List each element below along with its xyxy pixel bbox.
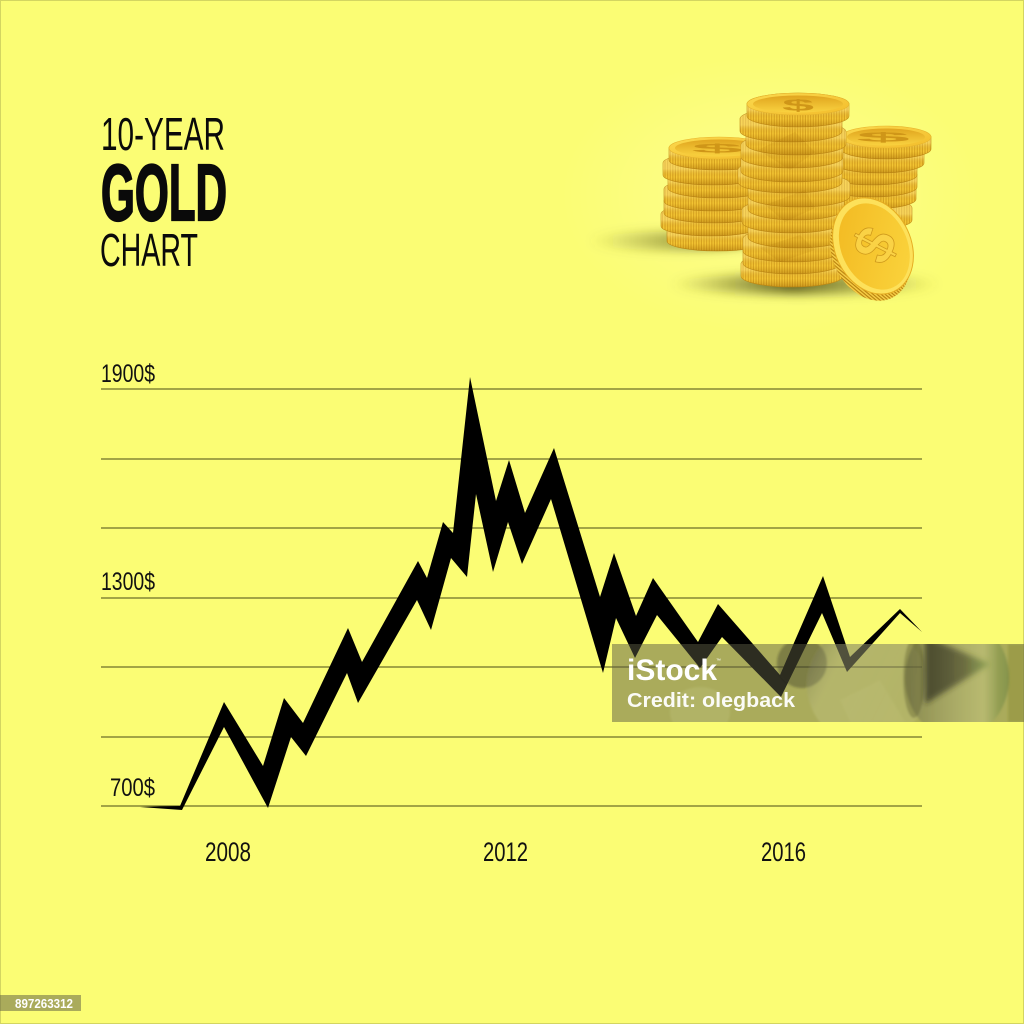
y-axis labels [101, 360, 155, 802]
label 2016: 2016 [761, 837, 806, 867]
banner background [612, 644, 1024, 722]
icon: gold coin stacks [560, 55, 980, 335]
left coin stack: $ [691, 141, 743, 155]
title line: CHART: CHART [100, 224, 198, 276]
center coin stack [738, 93, 850, 287]
label 1900$: 1900$ [101, 360, 155, 388]
diagonal shading on center stack [758, 132, 815, 262]
label 2008: 2008 [205, 837, 251, 867]
right coin stack: $ [856, 129, 910, 144]
center coin stack: $ [782, 96, 814, 114]
banner decorative shapes [671, 644, 1024, 722]
label 1300$: 1300$ [101, 568, 155, 596]
title line: GOLD: GOLD [101, 148, 227, 237]
left coin stack [661, 137, 769, 251]
trademark: ™ [716, 658, 721, 664]
title [100, 108, 227, 276]
id tag number: 897263312 [15, 997, 73, 1011]
x-axis labels [205, 837, 806, 867]
gold price line [140, 377, 922, 810]
image id tag [0, 995, 81, 1011]
dollar sign: $ [839, 217, 910, 273]
chart grid lines [101, 389, 922, 806]
credit line: Credit: olegback [627, 690, 796, 712]
iStock logo: iStock [627, 654, 717, 687]
label 2012: 2012 [483, 837, 528, 867]
watermark banner [612, 644, 1024, 722]
label 700$: 700$ [110, 774, 155, 802]
right coin stack [822, 126, 931, 230]
leaning coin [813, 185, 931, 314]
line chart [101, 360, 922, 867]
coin shadows [588, 232, 940, 294]
coin edge and face [813, 185, 931, 314]
id tag background [0, 995, 81, 1011]
title line: 10-YEAR: 10-YEAR [101, 108, 225, 160]
background glow behind coins [560, 55, 980, 335]
